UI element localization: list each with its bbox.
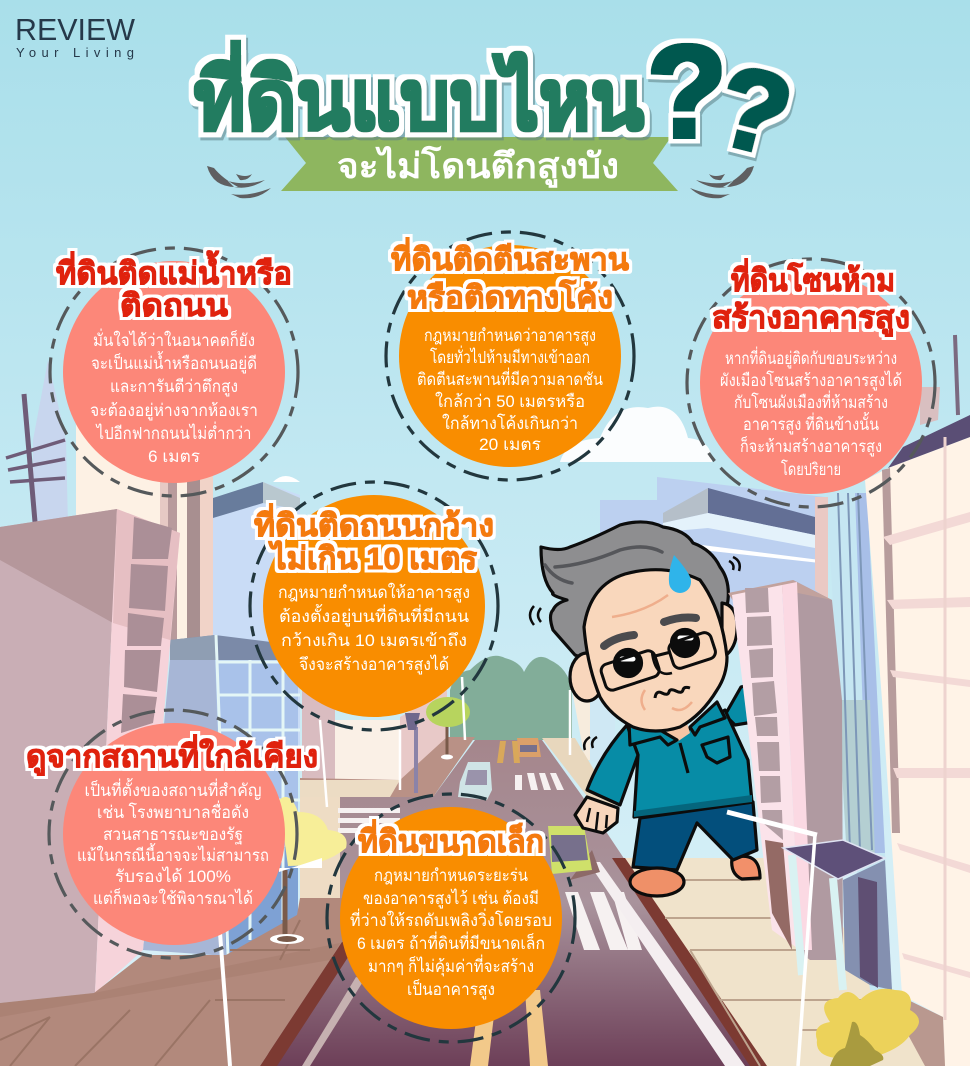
body text: [278, 582, 470, 675]
right mauve building: [793, 580, 843, 960]
motion marks: [530, 557, 740, 750]
logo: Review Your Living: REVIEW: [15, 12, 136, 47]
body text: ไปอีกฟากถนนไม่ต่ำกว่า: [95, 421, 251, 443]
body text: จะต้องอยู่ห่างจากห้องเรา: [90, 401, 258, 421]
window ledges: [883, 512, 970, 978]
panel: river or road: [50, 248, 298, 496]
white street pole: [220, 933, 230, 1066]
heading: ติดถนน: [120, 288, 228, 323]
body text: ใกล้กว่า 50 เมตรหรือ: [435, 391, 585, 411]
question mark small: ?: [705, 41, 803, 181]
cream tower: [76, 420, 213, 645]
nose: [652, 652, 672, 674]
body text: กับโซนผังเมืองที่ห้ามสร้าง: [734, 390, 888, 412]
side street corner: [300, 797, 340, 898]
logo: Review Your Living: Your Living: [16, 45, 134, 60]
eyebrows: [604, 635, 634, 646]
heading: [56, 250, 292, 323]
swoosh marks left: [207, 166, 271, 198]
yellow bush: [816, 989, 919, 1066]
body text: ต้องตั้งอยู่บนที่ดินที่มีถนน: [279, 604, 469, 627]
cityscape background: [0, 360, 950, 1066]
body text: 20 เมตร: [479, 435, 541, 454]
car: white: [458, 762, 492, 800]
eye highlights: [622, 638, 691, 659]
blue glass building: [143, 635, 300, 956]
cream building: [865, 437, 970, 1066]
body text: แต่ก็พอจะใช้พิจารณาได้: [93, 887, 253, 908]
shirt collar left: [629, 723, 677, 745]
panel: restricted zone: [687, 258, 935, 507]
panel: nearby places: [26, 710, 318, 958]
crosswalk near: [565, 892, 642, 950]
hair: [541, 522, 728, 665]
heading: ที่ดินขนาดเล็ก: [358, 819, 544, 859]
body text: [90, 328, 258, 466]
right ear: [722, 603, 737, 658]
hair highlight: [545, 547, 662, 583]
glass tower: [827, 493, 892, 990]
left far sidewalk: [300, 737, 475, 797]
body text: 6 เมตร ถ้าที่ดินที่มีขนาดเล็ก: [357, 931, 545, 953]
panel: road width: [250, 482, 498, 730]
body text: จะเป็นแม่น้ำหรือถนนอยู่ดี: [91, 351, 257, 374]
low central buildings: [302, 690, 335, 782]
body text: ก็จะห้ามสร้างอาคารสูง: [740, 435, 882, 457]
neck: [660, 723, 690, 742]
left mauve building: [0, 509, 180, 1003]
main heading: ที่ดินแบบไหน: [194, 41, 644, 147]
subtitle ribbon: [281, 137, 678, 191]
body text: [350, 866, 552, 1000]
body text: กว้างเกิน 10 เมตรเข้าถึง: [281, 631, 467, 650]
body text: ของอาคารสูงไว้ เช่น ต้องมี: [363, 888, 539, 909]
shirt pocket: [702, 737, 730, 763]
heading: ที่ดินโซนห้าม: [731, 258, 895, 298]
body text: โดยทั่วไปห้ามมีทางเข้าออก: [430, 345, 590, 367]
car: orange: [517, 738, 541, 757]
panel: small plot: [327, 794, 575, 1042]
pink strip beside tower: [815, 497, 828, 600]
body text: และการันตีว่าตึกสูง: [110, 377, 238, 397]
tree: green: [426, 697, 470, 760]
raised arm: [725, 680, 765, 725]
eyes: [614, 650, 642, 676]
body text: กฎหมายกำหนดว่าอาคารสูง: [424, 326, 596, 346]
body text: เป็นที่ตั้งของสถานที่สำคัญ: [84, 778, 262, 800]
left sidewalk: [0, 898, 356, 1066]
forehead wrinkle: [612, 595, 668, 617]
heading: หรือติดทางโค้ง: [407, 279, 613, 315]
distant spire: [33, 360, 68, 525]
body text: [77, 778, 269, 908]
body text: กฎหมายกำหนดระยะร่น: [374, 866, 528, 885]
body text: ที่ว่างให้รถดับเพลิงวิ่งโดยรอบ: [350, 908, 552, 930]
heading: [712, 258, 910, 337]
body text: [417, 326, 603, 454]
roof post far right: [955, 335, 958, 415]
dashed ring: [50, 248, 298, 496]
old man character: [530, 522, 765, 896]
green hill: [450, 656, 572, 740]
body text: อาคารสูง ที่ดินข้างนั้น: [743, 412, 879, 435]
far foot: [732, 856, 760, 879]
heading: ดูจากสถานที่ใกล้เคียง: [26, 734, 318, 776]
road centre line near: [470, 990, 548, 1066]
body text: จึงจะสร้างอาคารสูงได้: [299, 654, 449, 675]
question mark large: ?: [647, 18, 727, 165]
body text: มั่นใจได้ว่าในอนาคตก็ยัง: [93, 328, 255, 350]
cheek lines: [642, 690, 692, 710]
body text: หากที่ดินอยู่ติดกับขอบระหว่าง: [725, 346, 897, 369]
road lane stripes: [588, 862, 745, 1066]
body text: [720, 346, 902, 479]
lowered arm: [587, 725, 638, 805]
body text: มากๆ ก็ไม่คุ้มค่าที่จะสร้าง: [368, 954, 534, 977]
right far sidewalk: [542, 738, 615, 805]
heading: ที่ดินติดแม่น้ำหรือ: [56, 250, 292, 291]
heading: ที่ดินติดถนนกว้าง: [254, 503, 494, 543]
utility pole: [6, 394, 65, 522]
body text: กฎหมายกำหนดให้อาคารสูง: [278, 582, 470, 603]
heading: สร้างอาคารสูง: [712, 300, 910, 337]
title: [194, 18, 803, 198]
crosswalk far: [515, 773, 564, 790]
road: [262, 740, 763, 1066]
bus: yellow-green: [548, 826, 600, 880]
thin white poles: [320, 677, 570, 807]
shirt hem: [634, 795, 752, 817]
body text: สวนสาธารณะของรัฐ: [103, 825, 243, 845]
left ear: [570, 653, 604, 701]
lamp post: [405, 713, 420, 793]
distant blue towers: [210, 482, 300, 745]
trousers: [633, 802, 757, 870]
panel: bridge or curve: [386, 232, 634, 480]
heading: [254, 503, 494, 576]
face: [584, 570, 727, 731]
near foot: [630, 868, 684, 896]
disc: [63, 261, 285, 483]
body text: ติดตีนสะพานที่มีความลาดชัน: [417, 367, 603, 389]
sweat drop: [669, 555, 691, 593]
shirt placket: [680, 743, 688, 773]
finger lines: [587, 808, 607, 830]
clouds: [560, 407, 712, 462]
kiosk with awning: [727, 812, 892, 1066]
crosswalk left: [338, 808, 400, 833]
heading: [391, 237, 629, 315]
subtitle text: จะไม่โดนตึกสูงบัง: [337, 145, 619, 188]
hand: [575, 797, 618, 833]
right foreground buildings: [727, 335, 970, 1066]
wavy mouth: [655, 687, 690, 698]
street tree: yellow: [270, 797, 347, 944]
body text: รับรองได้ 100%: [115, 866, 231, 886]
heading: ไม่เกิน 10 เมตร: [268, 540, 477, 576]
right near sidewalk: [625, 858, 950, 1066]
heading: ที่ดินติดตีนสะพาน: [391, 237, 629, 277]
body text: 6 เมตร: [148, 447, 200, 466]
body text: โดยปริยาย: [781, 459, 841, 479]
body text: แม้ในกรณีนี้อาจจะไม่สามารถ: [77, 843, 269, 865]
body text: ผังเมืองโซนสร้างอาคารสูงได้: [720, 370, 902, 391]
swoosh marks right: [690, 166, 754, 198]
body text: ใกล้ทางโค้งเกินกว่า: [442, 413, 578, 433]
road centre lines far: [497, 741, 520, 763]
body text: เป็นอาคารสูง: [407, 978, 495, 1000]
body text: เช่น โรงพยาบาลชื่อดัง: [97, 800, 249, 822]
shirt collar right: [690, 702, 725, 735]
glasses: [599, 631, 717, 692]
shirt torso: [627, 710, 752, 817]
